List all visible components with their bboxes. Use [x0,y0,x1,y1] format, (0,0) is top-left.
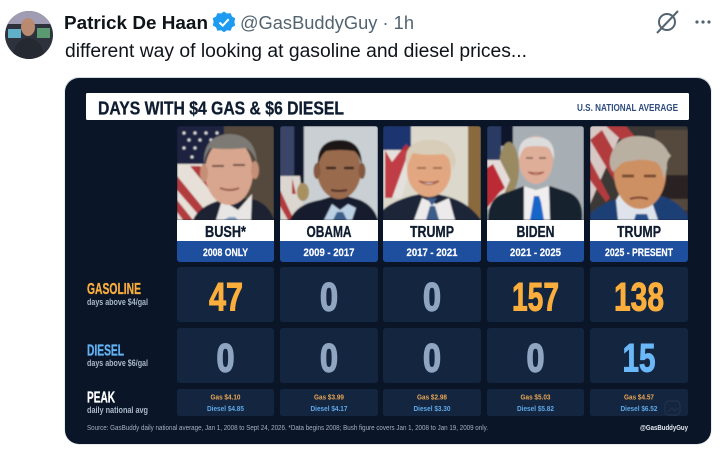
row label: gasoline: GASOLINE [87,281,141,298]
row: peak [87,389,688,416]
name: Biden: BIDEN [516,224,554,241]
handle and time: @GasBuddyGuy · 1h [240,12,414,33]
cell: Trump 2025 peak: Gas $4.57 [624,392,654,402]
column: Biden [487,126,584,262]
cell: Trump 2017 peak [383,389,481,416]
cell: Obama peak [280,389,378,416]
tweet text: different way of looking at gasoline and diesel prices... [65,41,527,62]
row label: diesel: DIESEL [87,342,124,360]
cell: Obama peak: Gas $3.99 [314,392,344,402]
cell: Bush diesel 0 [177,328,274,383]
cell: Trump 2017 gasoline 0: 0 [423,276,441,320]
cell: Bush peak: Diesel $4.85 [207,404,244,413]
cell: Trump 2017 peak: Gas $2.98 [417,392,447,402]
name: Bush: BUSH* [205,224,247,241]
portrait: Trump 2017 [383,126,481,220]
column: Trump 2017 [383,126,481,262]
cell: Trump 2025 peak [590,389,688,416]
cell: Bush peak: Gas $4.10 [210,392,240,402]
cell: Trump 2017 peak: Diesel $3.30 [414,404,450,413]
name: Obama: OBAMA [306,224,352,241]
years: Bush: 2008 ONLY [203,247,249,259]
years: Obama: 2009 - 2017 [304,247,354,259]
subtitle: U.S. NATIONAL AVERAGE [577,102,678,114]
cell: Biden diesel 0 [487,328,584,383]
column: Obama [280,126,378,262]
cell: Bush gasoline 47 [177,267,274,322]
cell: Trump 2025 peak: Diesel $6.52 [620,404,658,413]
tweet header [4,10,711,62]
row label: peak [87,390,148,415]
cell: Trump 2017 diesel 0: 0 [423,336,441,380]
row label: diesel [87,342,148,368]
cell: Trump 2025 gasoline 138 [590,267,688,322]
row: diesel [87,328,688,383]
row label: diesel: days above $6/gal [87,358,148,368]
cell: Trump 2025 diesel 15: 15 [622,336,656,380]
infographic card [64,77,712,444]
row label: peak: daily national avg [87,405,148,415]
cell: Biden peak: Gas $5.03 [520,392,550,402]
row label: peak: PEAK [87,390,116,406]
column: Bush [177,126,274,262]
cell: Bush gasoline 47: 47 [209,276,243,320]
cell: Bush peak [177,389,274,416]
portrait: Bush [177,126,274,220]
years: Biden: 2021 - 2025 [510,247,561,259]
cell: Trump 2025 diesel 15 [590,328,688,383]
column: Trump 2025 [590,126,688,262]
title: DAYS WITH $4 GAS & $6 DIESEL [98,98,344,118]
row: gasoline [87,267,688,322]
portrait: Obama [280,126,378,220]
cell: Trump 2017 diesel 0 [383,328,481,383]
credit: @GasBuddyGuy [640,425,688,432]
cell: Biden diesel 0: 0 [526,336,544,380]
portrait: Biden [487,126,584,220]
avatar [4,10,54,60]
icon: more menu [695,20,711,24]
row label: gasoline [87,281,148,307]
header bar [86,93,689,120]
cell: Trump 2017 gasoline 0 [383,267,481,322]
portrait: Trump 2025 [590,126,688,220]
cell: Obama diesel 0: 0 [320,336,338,380]
icon: verified badge [213,12,235,32]
row label: gasoline: days above $4/gal [87,297,148,307]
cell: Bush diesel 0: 0 [216,336,234,380]
name: Trump 2025: TRUMP [617,224,661,241]
cell: Obama peak: Diesel $4.17 [310,404,348,413]
cell: Biden gasoline 157: 157 [512,276,559,320]
icon: grok [657,11,678,33]
years: Trump 2025: 2025 - PRESENT [605,247,673,259]
cell: Biden peak [487,389,584,416]
icon: image watermark [665,401,680,415]
cell: Biden peak: Diesel $5.82 [517,404,554,413]
cell: Obama gasoline 0 [280,267,378,322]
cell: Obama diesel 0 [280,328,378,383]
source note: Source: GasBuddy daily national average, Jan 1, 2008 to Sept 24, 2026. *Data begins 2008; Bush figure covers Jan 1, 2008 to Jan 19, 2009 only. [87,425,488,432]
cell: Trump 2025 gasoline 138: 138 [614,276,664,320]
name: Trump 2017: TRUMP [410,224,454,241]
cell: Biden gasoline 157 [487,267,584,322]
author name: Patrick De Haan [64,12,208,33]
cell: Obama gasoline 0: 0 [320,276,338,320]
years: Trump 2017: 2017 - 2021 [406,247,458,259]
